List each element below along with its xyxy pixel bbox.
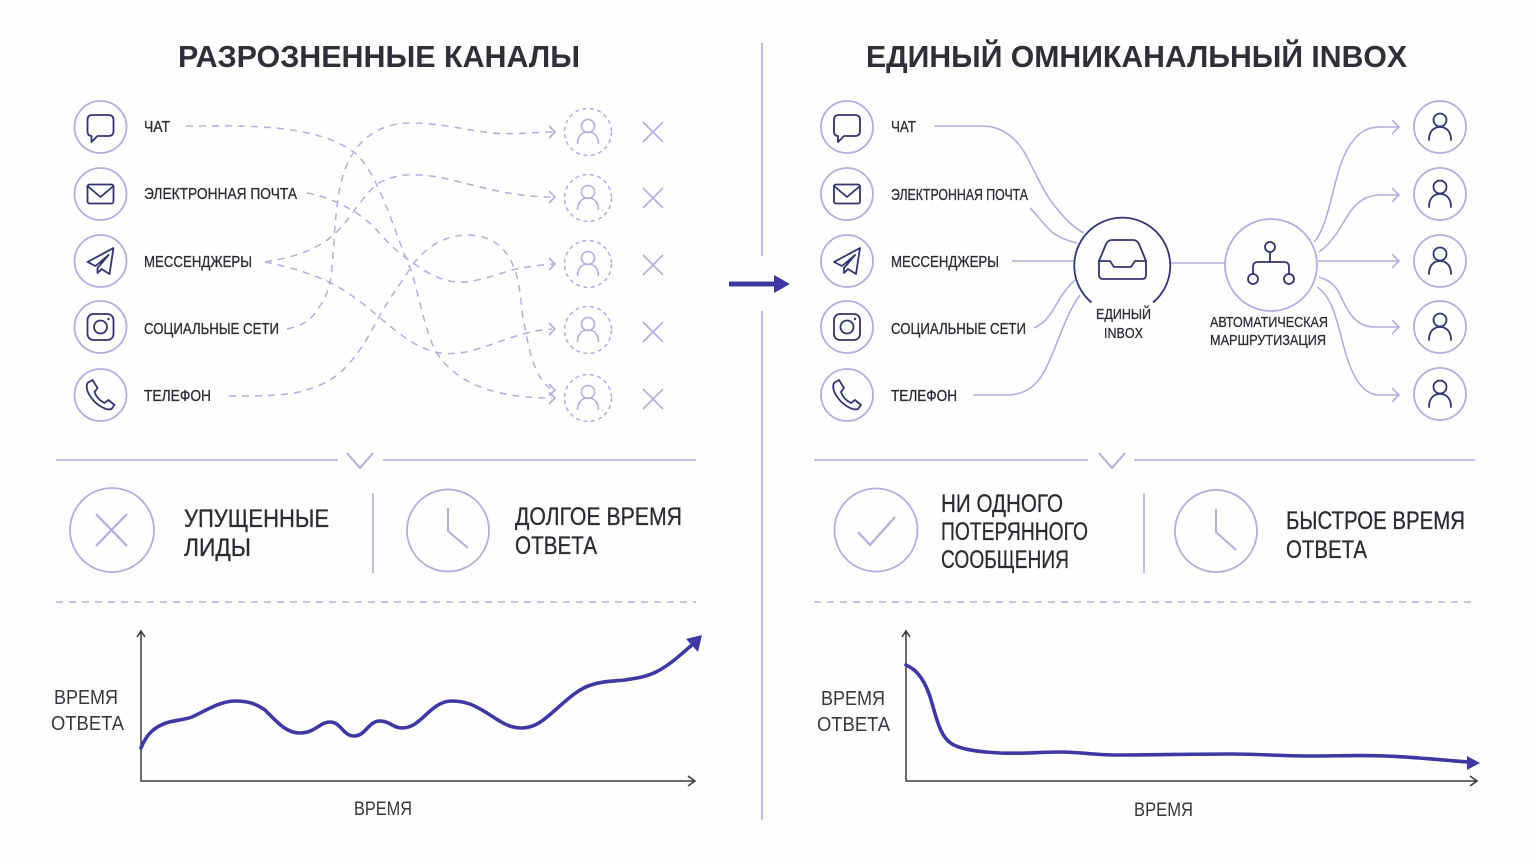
hub: automatic routing [1210,219,1328,349]
hub: unified inbox [1074,218,1170,342]
title: unified omnichannel inbox: ЕДИНЫЙ ОМНИКАНАЛЬНЫЙ INBOX [866,38,1407,74]
result: missed leads: УПУЩЕННЫЕ [184,505,329,533]
result: no lost messages: ПОТЕРЯННОГО [941,518,1088,546]
channel: messengers: МЕССЕНДЖЕРЫ [891,254,999,271]
channel: messengers [821,235,999,287]
channel: messengers: МЕССЕНДЖЕРЫ [144,254,252,271]
result: no lost messages: СООБЩЕНИЯ [941,546,1069,574]
channel: phone: ТЕЛЕФОН [144,388,211,405]
result: missed leads [70,488,329,572]
channel: social networks [74,301,279,353]
arrow: left to right [729,275,790,293]
agents [1414,101,1466,420]
result: fast response time [1144,490,1465,573]
result: no lost messages [834,488,1088,574]
right section divider with chevron [814,453,1475,468]
channel: social networks [821,301,1026,353]
channel: phone [821,369,957,421]
central vertical divider [761,43,763,820]
result: long response time: ОТВЕТА [515,532,597,560]
channel: messengers [74,235,252,287]
hub: automatic routing: АВТОМАТИЧЕСКАЯ [1210,315,1328,331]
result: fast response time: БЫСТРОЕ ВРЕМЯ [1286,507,1465,535]
channel: social networks: СОЦИАЛЬНЫЕ СЕТИ [144,321,279,338]
result: long response time [373,490,682,573]
chart: erratic response time: ОТВЕТА [51,713,125,735]
chart: fast response time: ВРЕМЯ [821,688,885,710]
channel: chat: ЧАТ [891,119,916,136]
result: long response time: ДОЛГОЕ ВРЕМЯ [515,503,682,531]
left section divider with chevron [56,453,696,468]
chart: erratic response time: ВРЕМЯ [354,799,412,820]
connections into inbox [934,126,1225,395]
dashed agents with crosses [564,108,663,422]
channel: email [821,168,1029,220]
connections out to agents [1314,120,1399,402]
channel: social networks: СОЦИАЛЬНЫЕ СЕТИ [891,321,1026,338]
channel: phone: ТЕЛЕФОН [891,388,957,405]
chart: fast response time [817,631,1480,821]
chart: erratic response time: ВРЕМЯ [54,687,118,709]
channel: phone [74,369,211,421]
hub: automatic routing: МАРШРУТИЗАЦИЯ [1210,333,1326,349]
hub: unified inbox: ЕДИНЫЙ [1096,305,1151,323]
result: no lost messages: НИ ОДНОГО [941,490,1063,518]
channel: chat: ЧАТ [144,119,170,136]
channel: chat [821,101,916,153]
panel: disparate channels flow [74,101,663,422]
dashed separators [56,601,1476,603]
chart: fast response time: ВРЕМЯ [1134,800,1193,821]
hub: unified inbox: INBOX [1104,326,1143,342]
result: missed leads: ЛИДЫ [184,534,251,562]
panel: unified inbox flow [821,101,1466,421]
title: disparate channels: РАЗРОЗНЕННЫЕ КАНАЛЫ [178,39,580,74]
channel: email: ЭЛЕКТРОННАЯ ПОЧТА [144,186,298,203]
result: fast response time: ОТВЕТА [1286,536,1367,564]
channel: email [74,168,298,220]
channel: email: ЭЛЕКТРОННАЯ ПОЧТА [891,187,1029,204]
chart: fast response time: ОТВЕТА [817,714,891,736]
dashed tangled connections [186,123,555,404]
chart: erratic response time [51,631,702,820]
channel: chat [74,101,170,153]
